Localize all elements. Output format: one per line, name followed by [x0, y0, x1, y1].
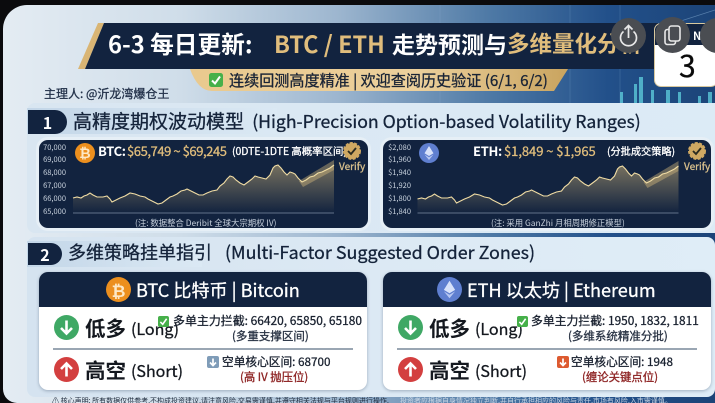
day number: 3 [679, 42, 696, 86]
title text [108, 26, 642, 60]
short row [54, 353, 330, 385]
icon: ethereum [437, 277, 462, 302]
long row [54, 312, 362, 344]
third button [700, 18, 715, 53]
chart note: (注: 采用 GanZhi 月相周期修正模型) [491, 217, 625, 229]
panel: BTC chart: 69,000 [43, 154, 66, 165]
panel: ETH chart [383, 140, 711, 228]
heading text: 高精度期权波动模型 (High-Precision Option-based Volatility Ranges) [73, 107, 641, 134]
badge 2 [28, 243, 62, 265]
row divider [53, 348, 353, 350]
card title: ETH 以太坊 | Ethereum [467, 277, 656, 303]
line chart [417, 161, 679, 214]
badge 1: 1 [43, 110, 52, 134]
panel: section 2 [27, 237, 715, 397]
long levels: 多单主力拦截: 1950, 1832, 1811 [531, 312, 699, 329]
month fragment: N [693, 28, 701, 44]
date card header [655, 24, 715, 45]
long row [398, 312, 699, 344]
short note: (高 IV 抛压位) [240, 369, 308, 385]
title text: BTC / ETH [274, 26, 385, 60]
host label: 主理人: @沂龙湾爆仓王 [44, 85, 169, 102]
panel: ETH chart: $1,920 [388, 180, 411, 191]
BTC range label: BTC: [98, 141, 126, 160]
BTC range tag: (0DTE-1DTE 高概率区间) [232, 143, 347, 158]
long note: (多维系统精准分批) [568, 328, 668, 344]
panel: ETH chart: $1,940 [388, 167, 411, 178]
card header [383, 272, 711, 307]
panel: BTC chart: 66,000 [43, 193, 66, 204]
icon: ethereum [419, 143, 439, 163]
title text: 6-3 每日更新: [108, 26, 253, 60]
row divider [397, 348, 697, 350]
long translation: (Long) [131, 316, 179, 340]
share button [611, 18, 646, 53]
subtitle ribbon [190, 69, 568, 91]
card header [39, 272, 367, 307]
axis labels: $2,080 [388, 142, 411, 153]
long label: 低多 [85, 312, 126, 342]
long translation: (Long) [475, 316, 523, 340]
short levels: 空单核心区间: 1948 [571, 353, 673, 370]
card: BTC orders [39, 272, 367, 390]
icon: up arrow [398, 357, 423, 382]
short note: (缠论关键点位) [582, 369, 658, 385]
panel: ETH chart: $1,800 [388, 193, 411, 204]
section 2 heading [27, 239, 535, 267]
banner shape [78, 23, 658, 69]
short translation: (Short) [475, 358, 527, 382]
long label: 低多 [429, 312, 470, 342]
ETH range values: $1,849 ~ $1,965 [504, 141, 596, 160]
card title: BTC 比特币 | Bitcoin [136, 277, 300, 303]
icon: check [517, 316, 528, 327]
icon: red down [557, 356, 569, 368]
panel: BTC chart: 68,000 [43, 167, 66, 178]
axis labels: 70,000 [43, 142, 66, 153]
badge 1 [28, 110, 67, 134]
ETH range label: ETH: [473, 141, 502, 160]
panel: BTC chart: 67,000 [43, 180, 66, 191]
short row [398, 353, 673, 385]
icon: verify badge [688, 142, 706, 160]
heading translation: (Multi-Factor Suggested Order Zones) [225, 239, 535, 265]
icon: verify badge [343, 142, 361, 160]
panel: BTC chart [39, 140, 368, 228]
panel: BTC chart: 65,000 [43, 206, 66, 217]
title text: 走势预测与 [392, 26, 507, 60]
panel: ETH chart: $1,960 [388, 154, 411, 165]
date card [655, 24, 715, 86]
long levels: 多单主力拦截: 66420, 65850, 65180 [173, 312, 362, 329]
panel: section 1 [27, 103, 715, 233]
subtitle text: 连续回测高度精准 | 欢迎查阅历史验证 (6/1, 6/2) [229, 69, 548, 91]
long note: (多重支撑区间) [232, 328, 309, 344]
verify label: Verify [339, 158, 365, 173]
icon: bitcoin [75, 143, 95, 163]
chart note: (注: 数据整合 Deribit 全球大宗期权 IV) [135, 217, 276, 229]
card: ETH orders [383, 272, 711, 390]
title banner [78, 23, 658, 69]
short translation: (Short) [131, 358, 183, 382]
icon: bitcoin: ₿ [112, 277, 125, 302]
copy button [655, 17, 690, 53]
icon: down arrow [54, 315, 79, 340]
title text: 多维量化分析 [507, 27, 642, 59]
short label: 高空 [429, 354, 470, 384]
short label: 高空 [85, 354, 126, 384]
icon: down arrow [398, 315, 423, 340]
badge 2: 2 [40, 242, 50, 266]
ETH range tag: (分批成交策略) [607, 143, 675, 158]
BTC range values: $65,749 ~ $69,245 [127, 141, 227, 160]
verify label: Verify [684, 158, 710, 173]
icon: green check [209, 73, 223, 87]
icon: blue down [207, 356, 219, 368]
panel: ETH chart: $1,840 [388, 206, 411, 217]
short levels: 空单核心区间: 68700 [222, 353, 330, 370]
heading text: 多维策略挂单指引 [68, 239, 212, 265]
icon: check [158, 316, 169, 327]
section 1 heading [27, 107, 641, 134]
icon: bitcoin [106, 277, 131, 302]
icon: up arrow [54, 357, 79, 382]
line chart [72, 160, 334, 214]
icon: bitcoin: ₿ [79, 143, 91, 163]
